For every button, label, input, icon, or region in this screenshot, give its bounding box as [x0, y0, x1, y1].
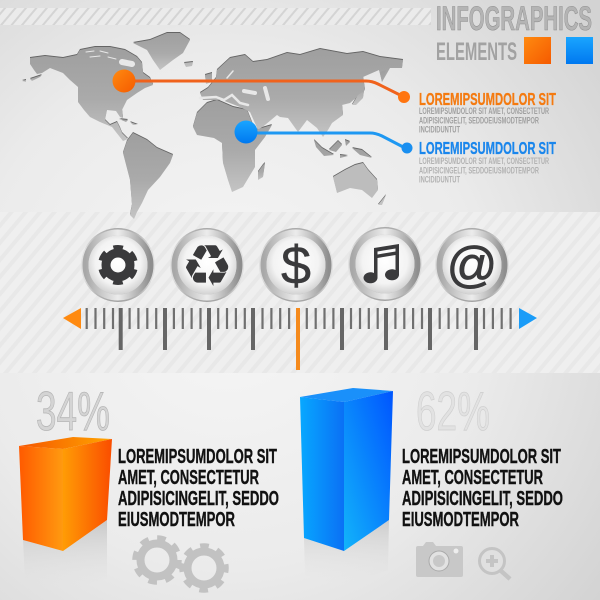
left body text: LOREMIPSUMDOLOR SIT	[118, 445, 277, 468]
62 percent: 62%	[416, 380, 490, 442]
button: recycle	[170, 228, 244, 302]
left body text: AMET, CONSECTETUR	[118, 466, 259, 489]
orange end dot	[398, 91, 410, 103]
Greenland and Iceland	[133, 33, 193, 70]
orange connector line	[124, 81, 404, 97]
inland seas and Arctic channels	[86, 51, 268, 105]
striped top band	[0, 8, 431, 25]
button: at sign: @	[447, 237, 497, 293]
button: dollar: $	[281, 236, 311, 296]
South America	[123, 133, 173, 219]
orange centre tick	[296, 308, 300, 370]
button: recycle: ♻	[181, 232, 233, 300]
blue bar shadow	[304, 520, 389, 586]
icon: twin gears	[135, 538, 226, 590]
orange legend swatch	[524, 37, 551, 64]
Australia	[333, 163, 378, 198]
blue map marker	[234, 120, 258, 144]
blue 3D bar	[300, 388, 393, 551]
Eurasia	[200, 49, 403, 137]
left body text: EIUSMODTEMPOR	[118, 508, 235, 531]
right body text: EIUSMODTEMPOR	[402, 508, 519, 531]
orange callout text: INCIDIDUNTUT	[419, 124, 460, 134]
major ticks	[121, 308, 476, 350]
blue legend swatch	[566, 37, 593, 64]
Caribbean islands	[119, 119, 138, 125]
left body text	[118, 445, 279, 531]
blue connector line	[246, 133, 407, 149]
Africa	[193, 100, 272, 192]
left orange arrow	[63, 308, 81, 329]
striped middle band	[0, 212, 600, 373]
subtitle: ELEMENTS	[436, 38, 517, 66]
orange map marker	[112, 70, 136, 92]
Japan and Kamchatka islands	[352, 70, 386, 105]
Alaska tail	[22, 75, 42, 82]
North America	[30, 47, 153, 141]
blue callout text: INCIDIDUNTUT	[419, 174, 460, 184]
blue end dot	[402, 142, 412, 154]
left body text: ADIPISICINGELIT, SEDDO	[118, 487, 279, 510]
orange bar shadow	[23, 520, 107, 592]
Southeast Asia islands	[314, 140, 386, 205]
Madagascar	[258, 163, 265, 180]
button: music	[348, 227, 422, 301]
orange callout text	[419, 89, 556, 134]
right blue arrow	[519, 308, 537, 329]
world map	[22, 33, 403, 219]
timeline ruler	[87, 308, 511, 370]
button: gear	[81, 228, 155, 302]
Britain	[205, 73, 212, 84]
button: at sign	[435, 228, 509, 302]
right body text	[402, 445, 563, 531]
34 percent: 34%	[36, 380, 110, 442]
orange 3D bar	[19, 437, 112, 551]
minor ticks	[87, 308, 511, 329]
button: dollar	[259, 228, 333, 302]
icon: magnifier	[480, 548, 510, 579]
blue callout text	[419, 138, 556, 184]
icon: camera	[416, 542, 463, 577]
